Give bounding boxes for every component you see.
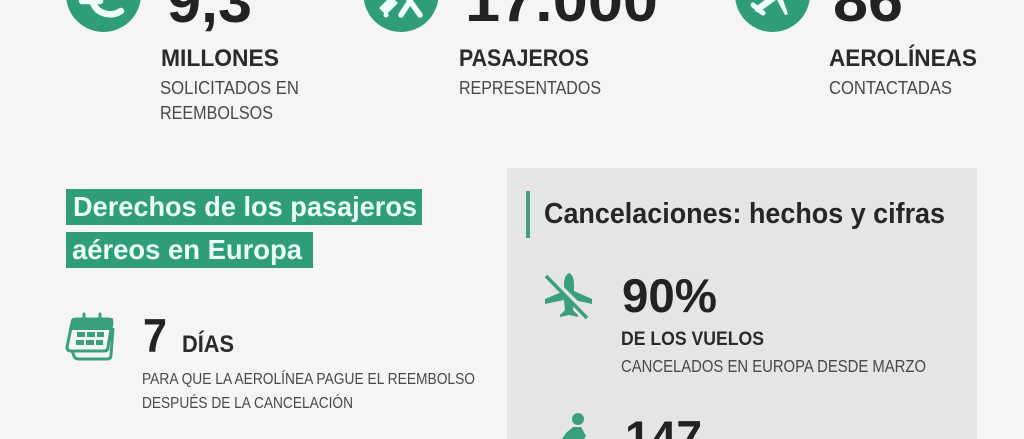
description: reembolso: PARA QUE LA AEROLÍNEA PAGUE EL REEMBOLSO [142,371,475,388]
icon: person [562,413,586,439]
description: reembolso: DESPUÉS DE LA CANCELACIÓN [142,395,353,412]
icon: airplane [735,0,810,32]
description: contactadas: CONTACTADAS [829,77,952,98]
label: pasajeros: PASAJEROS [459,45,589,72]
icon: passenger luggage [364,0,438,32]
number: 90%: 90% [622,269,717,322]
label: días: DÍAS [182,330,234,358]
label: de los vuelos: DE LOS VUELOS [621,328,764,350]
icon: cancelled flight [545,273,592,318]
panel: cancelaciones [507,168,977,439]
right: 7 días [67,309,475,412]
description: reembolso [142,371,475,412]
icon: euro [66,0,141,32]
heading: derechos de los pasajeros [66,189,422,268]
heading: cancelaciones [526,191,945,238]
description: solicitados en reembolsos [160,77,299,123]
stat: aerolíneas contactadas [735,0,977,98]
stat: pasajeros representados [364,0,658,98]
heading: derechos de los pasajeros: Derechos de los pasajeros [73,191,417,222]
heading: derechos de los pasajeros: aéreos en Europa [72,234,302,265]
description: solicitados en reembolsos: SOLICITADOS EN [160,77,299,98]
description: cancelados: CANCELADOS EN EUROPA DESDE MARZO [621,356,926,376]
number: 7: 7 [143,309,167,362]
icon: calendar [67,314,113,359]
heading: cancelaciones: Cancelaciones: hechos y cifras [544,198,945,230]
description: representados: REPRESENTADOS [459,77,601,98]
label: aerolíneas: AEROLÍNEAS [829,44,977,72]
label: millones: MILLONES [161,45,279,72]
stat: millones solicitados [66,0,299,123]
description: solicitados en reembolsos: REEMBOLSOS [160,102,273,123]
